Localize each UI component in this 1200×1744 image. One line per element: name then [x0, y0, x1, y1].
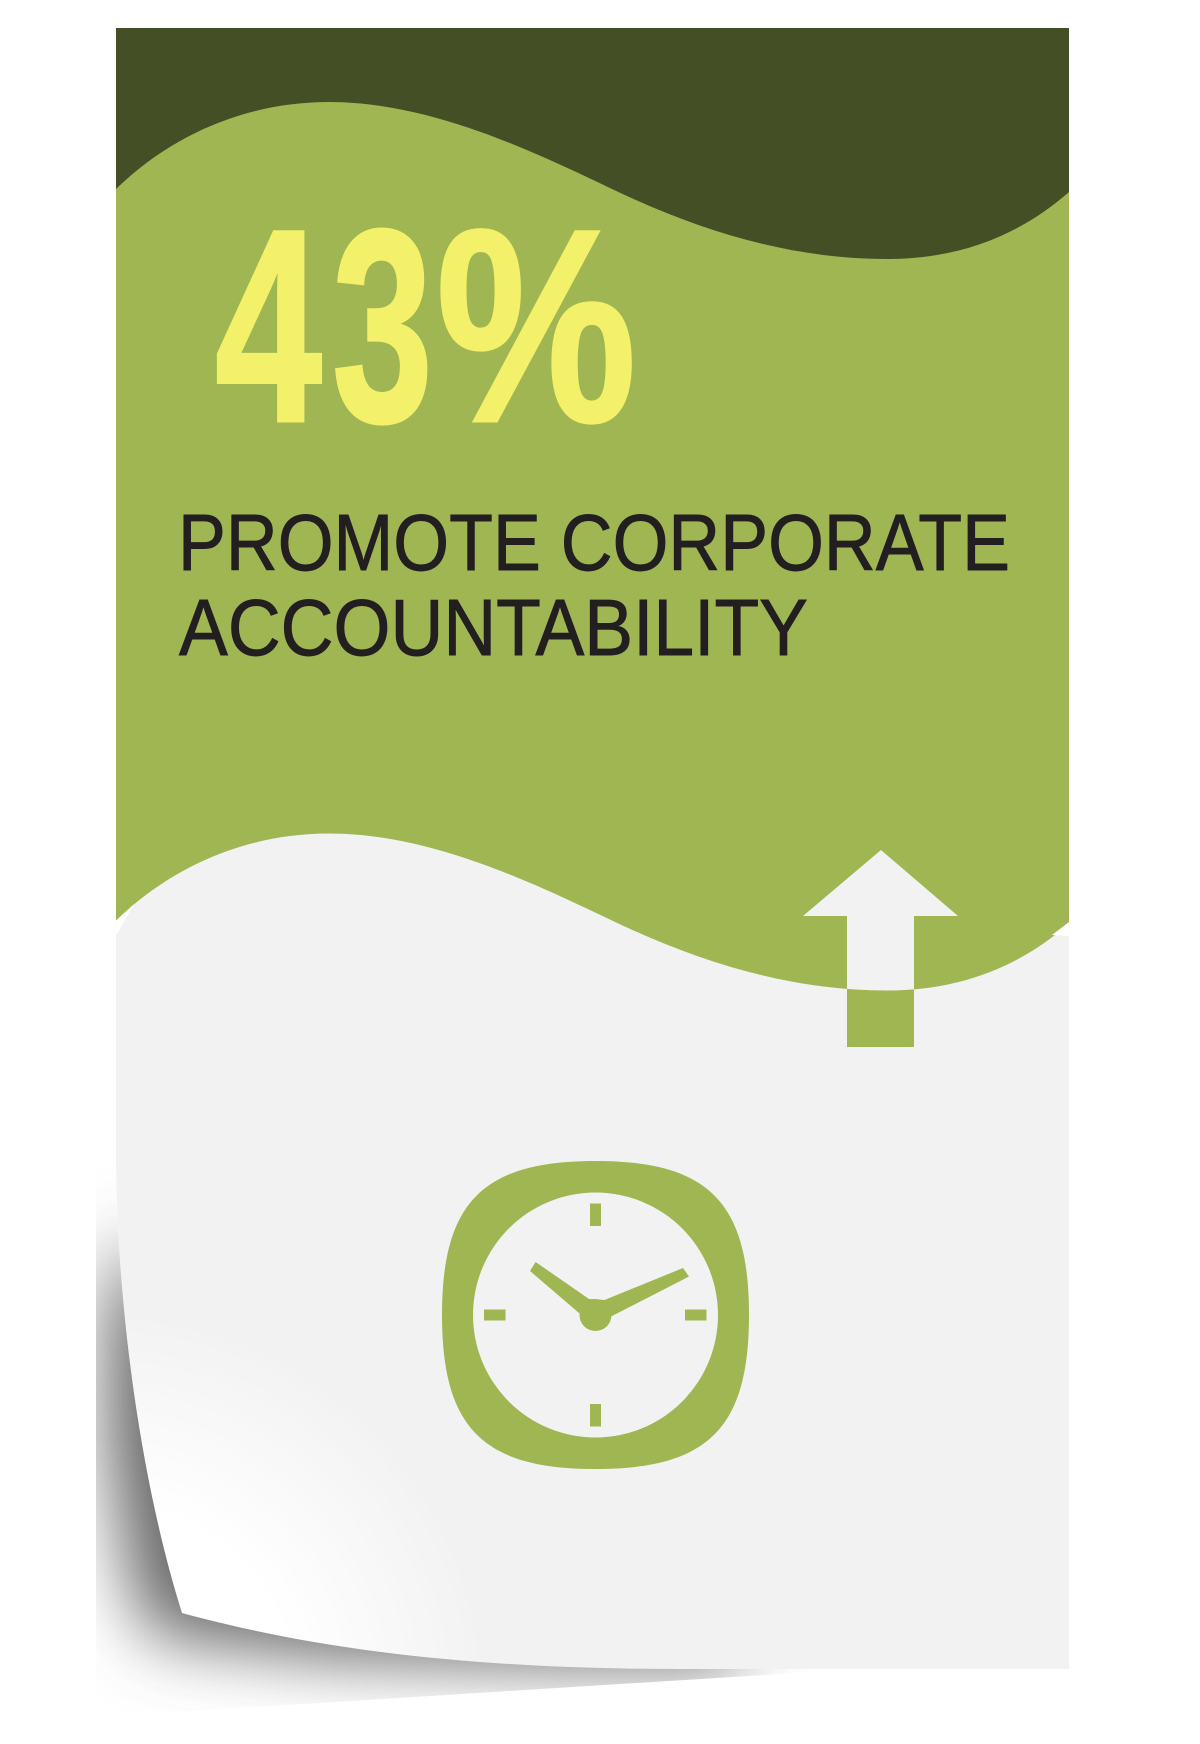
panel: green band [116, 100, 1069, 990]
big percentage: 3 [332, 173, 433, 480]
big percentage: 4 [215, 173, 322, 480]
panel: dark green header wave [116, 28, 1069, 259]
icon: clock [442, 1161, 749, 1469]
icon: up arrow [803, 850, 958, 1047]
big percentage [215, 173, 637, 480]
statement text [178, 498, 1010, 672]
panel: paper [116, 825, 1069, 1669]
paper shadow [108, 1230, 740, 1664]
statement text: PROMOTE CORPORATE [178, 498, 1010, 587]
big percentage: % [436, 173, 637, 480]
statement text: ACCOUNTABILITY [179, 583, 808, 672]
